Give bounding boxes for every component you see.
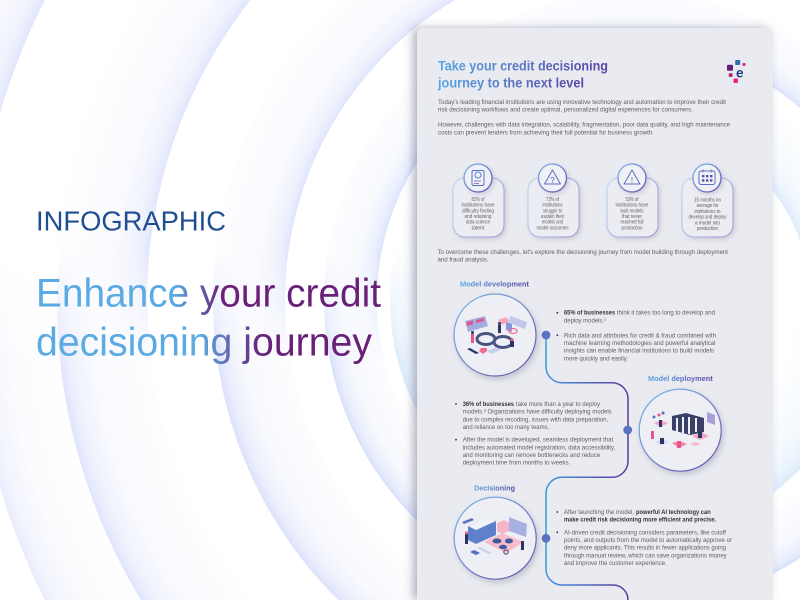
intro text: Today's leading financial institutions are using innovative technology and automation to improve their credit <box>438 99 726 106</box>
text block: model deployment: due to complex recoding, issues with data preparation, <box>463 416 608 423</box>
stat card: 82%: data science <box>466 220 490 226</box>
left label: INFOGRAPHIC: INFOGRAPHIC <box>36 206 226 237</box>
text block: decisioning: points, and outputs from the model to automatically approve or <box>564 537 733 544</box>
text block: model deployment: take more than a year to deploy <box>516 401 601 408</box>
text block: model development: insights can enable financial institutions to build models <box>564 348 715 355</box>
stat card: 53% <box>607 164 658 237</box>
left headline: decisioning journey <box>36 321 372 365</box>
stat card: 53%: built models <box>620 208 644 214</box>
text block: model deployment: includes automated model registration, data accessibility, <box>463 444 615 451</box>
icon: logo <box>727 60 746 83</box>
text block: model development: 65% of businesses <box>564 310 615 317</box>
text block: model deployment: models.² Organizations have difficulty deploying models <box>463 409 612 416</box>
panel title <box>437 58 608 90</box>
stat card: 72%: explain their <box>541 214 564 220</box>
intro text: However, challenges with data integration, scalability, fragmentation, poor data quality, and high maintenance <box>438 122 730 129</box>
text block: decisioning <box>556 509 733 567</box>
panel title: journey to the next level <box>437 74 584 90</box>
text block: decisioning: deny more applicants. This results in fewer applications going <box>564 545 726 552</box>
stat card: 82%: and retaining <box>464 214 492 220</box>
panel title: Take your credit decisioning <box>438 58 608 74</box>
illustration: model deployment <box>639 389 721 471</box>
text block: decisioning: make credit risk decisioning more efficient and precise. <box>564 517 716 524</box>
text block: model development <box>556 310 716 362</box>
stat card: 82%: difficulty finding <box>462 208 494 214</box>
connector dot: deployment <box>623 426 632 434</box>
text block: model development: more quickly and easily. <box>564 355 628 362</box>
icon: logo: e <box>736 65 744 80</box>
transition text: To overcome these challenges, let's explore the decisioning journey from model building through deployment <box>438 249 728 256</box>
stat card: 53%: production <box>622 225 643 231</box>
stat card: 53%: institutions have <box>616 203 649 209</box>
stat card: 82% <box>453 164 504 237</box>
heading: Decisioning: Decisioning <box>474 483 515 492</box>
stat card: 15 months: a model into <box>695 220 720 226</box>
illustration: model development <box>454 294 536 376</box>
text block: decisioning: After launching the model, <box>564 509 634 516</box>
stat card: 53%: reached full <box>620 220 644 226</box>
stat card: 72%: struggle to <box>543 208 562 214</box>
transition text <box>438 249 728 263</box>
heading: Model development: Model development <box>460 279 529 288</box>
connector dot: decisioning <box>542 534 550 543</box>
text block: model development: think it takes too long to develop and <box>617 310 715 317</box>
text block: model deployment <box>455 401 615 467</box>
intro text: risk decisioning workflows and create optimal, personalized digital experiences for consumers. <box>438 107 693 114</box>
text block: decisioning: powerful AI technology can <box>636 509 711 516</box>
transition text: and fraud analysis. <box>438 256 489 263</box>
heading: Model deployment: Model deployment <box>648 374 713 383</box>
text block: model deployment: deployment time from months to weeks. <box>463 460 570 467</box>
stat card: 72%: model outcomes <box>536 225 569 231</box>
stat card: 82%: 82% of <box>472 197 485 203</box>
illustration: decisioning <box>454 497 536 579</box>
stat card: 72%: models and <box>542 220 563 226</box>
text block: model deployment: After the model is developed, seamless deployment that <box>463 437 613 444</box>
connector dot: development <box>542 331 550 339</box>
text block: decisioning: AI-driven credit decisioning considers parameters, like cutoff <box>564 529 726 536</box>
intro text: costs can prevent lenders from achieving their full potential for business growth. <box>438 129 654 136</box>
icon: warning question: ? <box>550 176 555 185</box>
left headline: Enhance your credit <box>36 271 381 315</box>
stat card: 15 months: average for <box>696 203 719 209</box>
text block: decisioning: and improve the customer experience. <box>564 560 667 567</box>
icon: calendar <box>693 164 721 192</box>
stat card: 82%: institutions have <box>462 203 495 209</box>
left headline <box>36 271 381 365</box>
text block: decisioning: through manual review, which can save organizations money <box>564 552 727 559</box>
stat card: 15 months: institutions to <box>694 209 721 215</box>
stat card: 72%: institutions <box>542 203 563 209</box>
stat card: 15 months <box>682 164 733 237</box>
text block: model deployment: 36% of businesses <box>463 401 514 408</box>
stat card: 72% <box>528 164 579 237</box>
stat card: 53%: that never <box>622 214 642 220</box>
icon: warning exclamation: ! <box>631 176 633 185</box>
text block: model development: deploy models.¹ <box>564 317 607 324</box>
stat card: 72%: 72% of <box>546 197 559 203</box>
icon: data science talent <box>464 164 492 192</box>
text block: model deployment: and reliance on too many teams. <box>463 424 549 431</box>
text block: model development: machine learning methodologies and powerful analytical <box>564 340 716 347</box>
stat card: 82%: talent <box>472 225 485 231</box>
text block: model development: Rich data and attributes for credit & fraud combined with <box>564 332 716 339</box>
journey connector line <box>546 335 628 600</box>
stat card: 15 months: 15 months on <box>694 198 721 204</box>
panel: infographic page <box>417 28 773 600</box>
stat card: 15 months: production <box>697 226 718 232</box>
stat card: 15 months: develop and deploy <box>688 215 727 221</box>
text block: model deployment: and monitoring can remove bottlenecks and reduce <box>463 452 600 459</box>
stat card: 53%: 53% of <box>626 197 639 203</box>
intro text <box>438 99 730 136</box>
